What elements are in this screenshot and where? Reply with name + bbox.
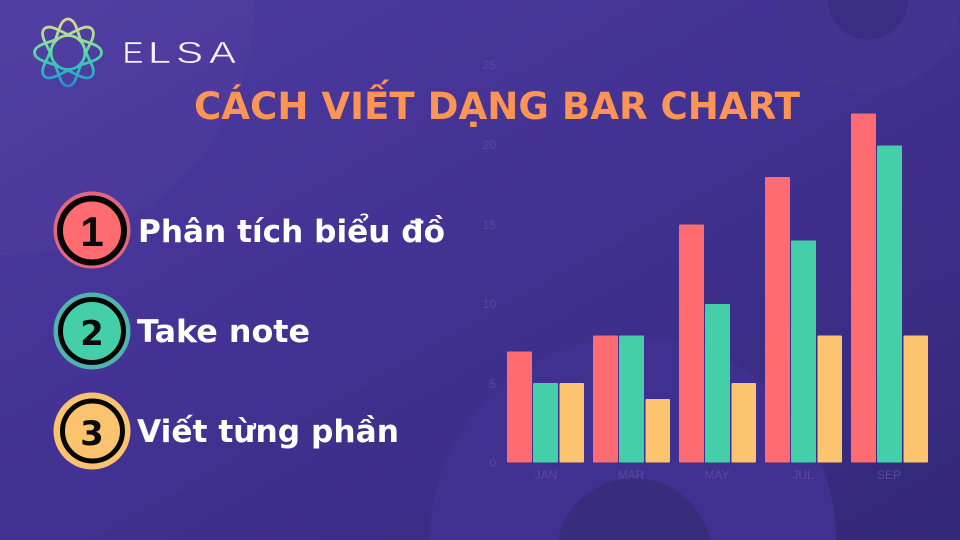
y axis labels: 0: [489, 456, 496, 470]
title: CÁCH VIẾT DẠNG BAR CHART: [194, 79, 801, 128]
step 2: [54, 292, 310, 370]
y axis labels: 15: [483, 218, 496, 232]
x axis labels: MAY: [704, 468, 730, 482]
y axis labels: 25: [483, 58, 496, 72]
bars: JAN: [507, 352, 584, 462]
wordmark: L: [148, 35, 171, 70]
x axis labels: MAR: [618, 468, 645, 482]
step label: Phân tích biểu đồ: [138, 214, 445, 250]
step 3: [54, 392, 399, 470]
icon: number 1 badge: 1: [80, 208, 104, 255]
x axis labels: [535, 468, 901, 482]
icon: number 3 badge: 3: [80, 414, 104, 454]
bars: MAR: [593, 336, 670, 462]
x axis labels: JUL: [792, 468, 814, 482]
wordmark: A: [209, 35, 236, 70]
step label: Take note: [137, 314, 310, 350]
wordmark: E: [122, 35, 144, 70]
x axis labels: SEP: [877, 468, 901, 482]
icon: number 2 badge: [54, 292, 130, 370]
icon: number 3 badge: [54, 392, 130, 470]
icon: number 1 badge: [54, 192, 130, 268]
icon: ELSA star knot: [33, 18, 103, 88]
logo: ELSA: [30, 14, 236, 90]
y axis labels: 10: [483, 297, 496, 311]
bars: MAY: [679, 224, 756, 462]
step label: Viết từng phần: [137, 414, 399, 450]
bars: JUL: [765, 177, 842, 462]
y axis labels: [483, 58, 496, 470]
y axis labels: 20: [483, 138, 496, 152]
x axis labels: JAN: [535, 468, 557, 482]
bars: SEP: [851, 114, 928, 462]
step 1: [54, 192, 445, 268]
icon: number 2 badge: 2: [80, 314, 104, 354]
y axis labels: 5: [489, 377, 496, 391]
wordmark: S: [176, 35, 203, 70]
bar chart: [483, 58, 928, 482]
wordmark: [122, 35, 236, 70]
